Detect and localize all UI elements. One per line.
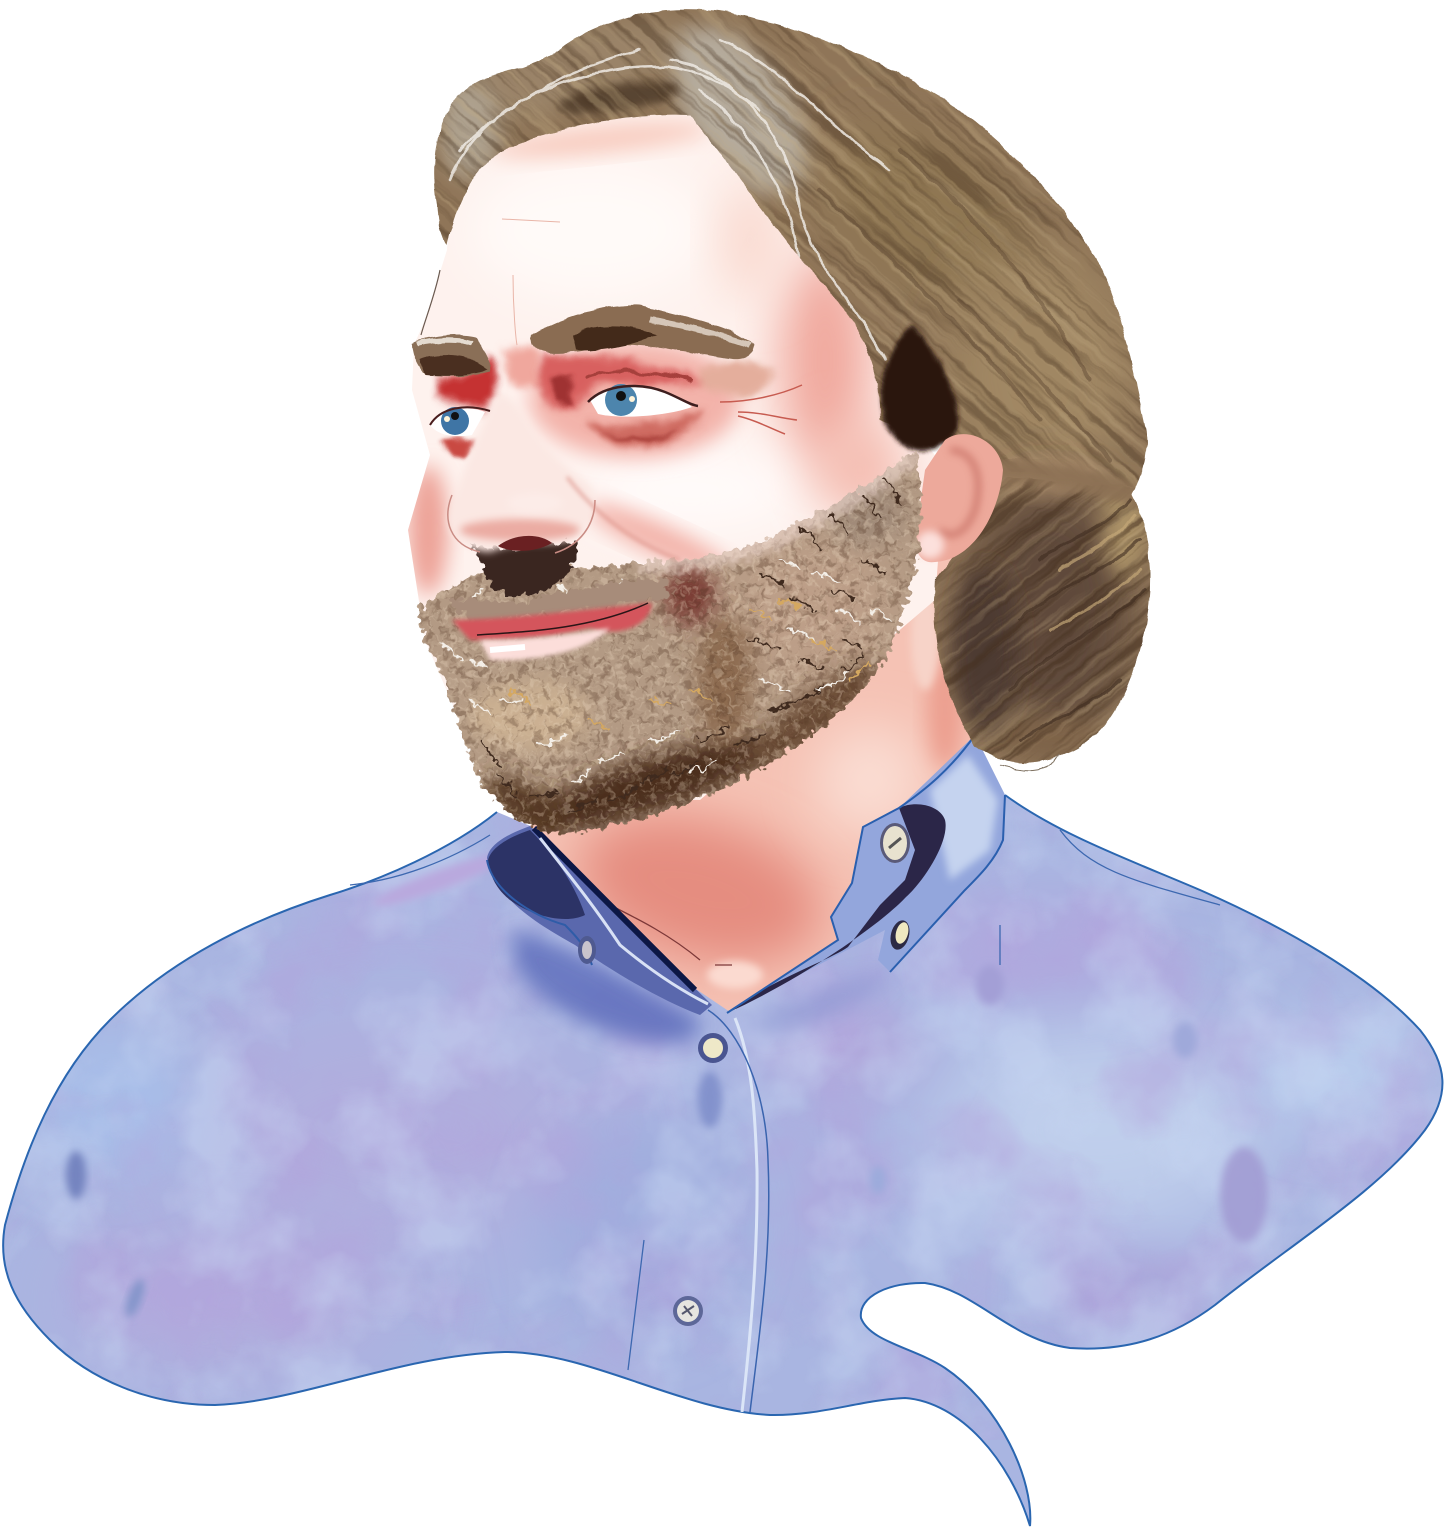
face	[408, 92, 945, 800]
collar edge	[727, 735, 1005, 1013]
skin tones	[408, 115, 905, 595]
placket line	[735, 1018, 757, 1412]
button: collar top	[880, 823, 910, 863]
eyebrow: right	[532, 305, 755, 359]
placket and buttons	[673, 1010, 769, 1412]
smile line	[567, 477, 680, 560]
dark inner collar	[488, 830, 585, 919]
eye wrinkles	[720, 385, 802, 434]
button: lower	[673, 1296, 703, 1326]
hair shadow behind ear	[881, 325, 958, 451]
collar highlight	[930, 755, 998, 880]
shirt seam lines	[350, 830, 1220, 1370]
nostril	[498, 536, 552, 551]
beard curl texture	[418, 454, 922, 834]
dark inner collar	[727, 804, 946, 1013]
shirt watercolour washes	[0, 800, 1445, 1440]
eyes	[430, 384, 698, 436]
neck crease	[610, 905, 732, 965]
right collar	[727, 735, 1005, 1013]
hair streak texture: lower curl	[934, 478, 1150, 764]
neck	[530, 530, 985, 1012]
forehead line	[502, 219, 560, 345]
hair seam blend	[985, 468, 1145, 500]
hair strands	[450, 40, 1145, 740]
nose	[448, 393, 680, 560]
eyebrow: left	[412, 335, 490, 376]
shirt body	[0, 735, 1445, 1526]
temple outline	[421, 270, 440, 335]
beard	[416, 452, 924, 836]
hair tonal washes	[424, 0, 1147, 758]
beard tonal washes	[470, 475, 905, 852]
shirt outline	[3, 795, 1442, 1526]
eyebrows	[412, 305, 755, 376]
nose outline	[448, 495, 595, 553]
beard top edge fade	[640, 450, 915, 560]
button: collar bottom	[887, 918, 913, 952]
button: upper	[698, 1033, 728, 1063]
eye: right	[588, 384, 698, 417]
loose hair strand	[1000, 755, 1060, 770]
button: left collar	[578, 936, 596, 964]
hair	[434, 8, 1150, 772]
eye: left	[430, 407, 490, 436]
eye socket shading	[436, 345, 773, 458]
hair streak texture: upper mass	[434, 9, 1148, 486]
mouth	[452, 603, 652, 660]
left collar	[487, 826, 712, 1015]
moustache	[445, 540, 669, 622]
collar edge	[534, 828, 695, 990]
beard hair strokes	[440, 480, 899, 810]
ear	[915, 434, 1003, 562]
